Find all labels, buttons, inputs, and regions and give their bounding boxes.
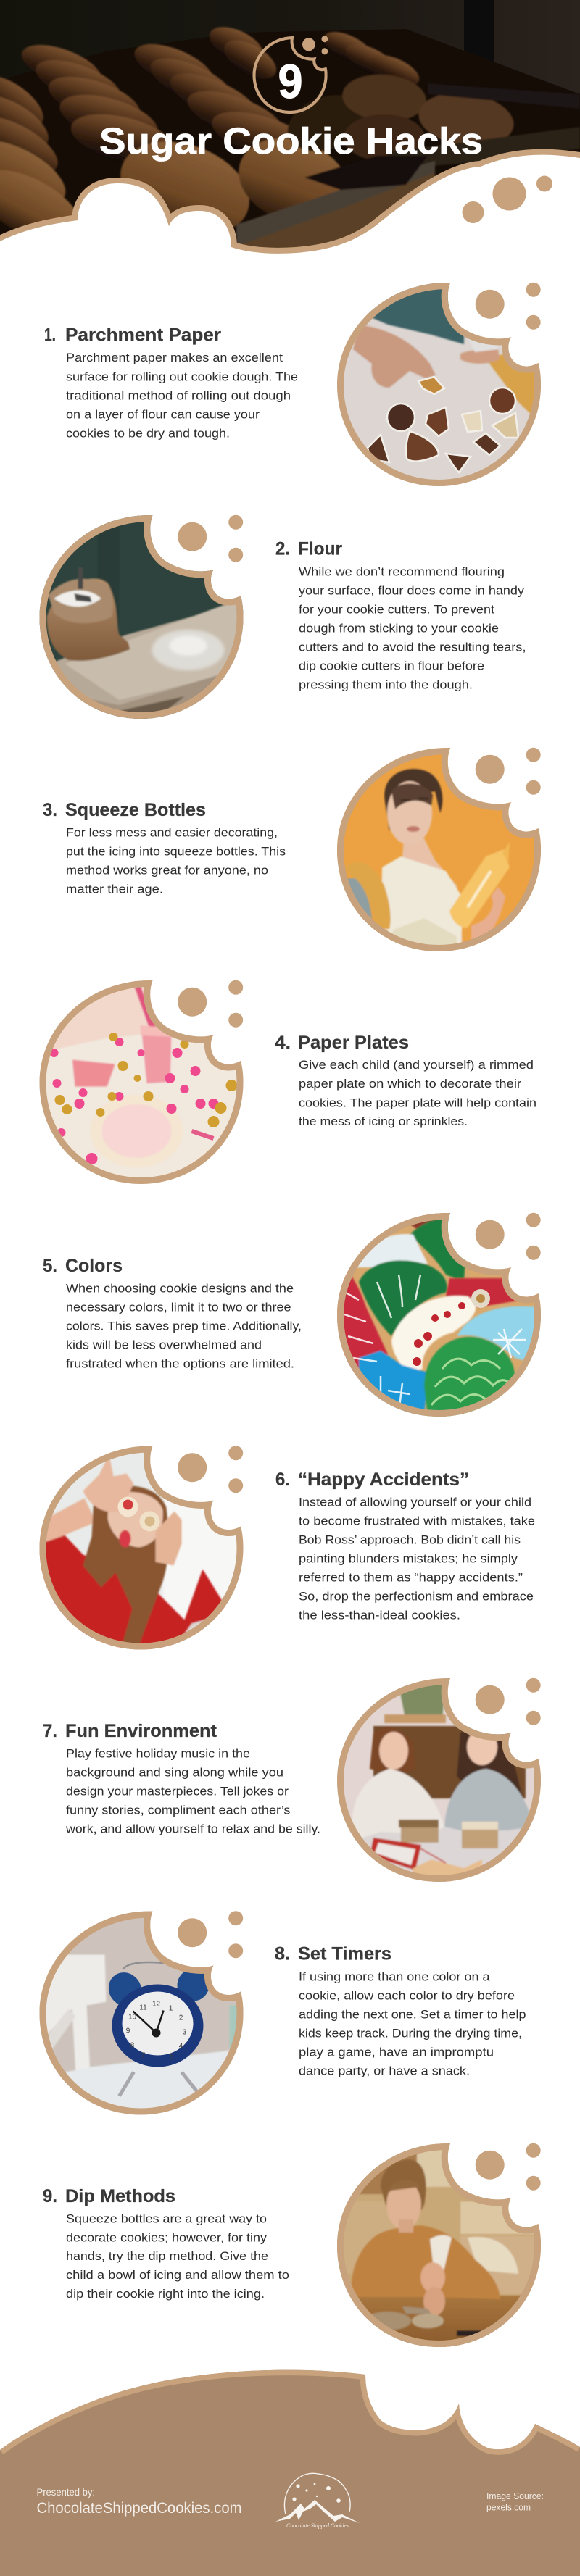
heading: Parchment Paper — [65, 325, 221, 346]
text block: If using more than one color on a — [299, 1971, 490, 1984]
text block: So, drop the perfectionism and embrace — [299, 1590, 534, 1603]
panel: 1 Parchment Paper — [44, 283, 541, 486]
image: blue alarm clock: 7 — [141, 2052, 146, 2059]
heading: 8. — [275, 1943, 290, 1964]
image: blue alarm clock — [39, 1911, 244, 2114]
heading: 6. — [276, 1470, 290, 1490]
icon: crumbs — [476, 283, 541, 330]
text block — [66, 826, 286, 896]
text block: When choosing cookie designs and the — [66, 1282, 294, 1295]
footer: presented by — [36, 2486, 242, 2517]
text block: work, and allow yourself to relax and be silly. — [65, 1822, 320, 1835]
image: bag of flour on a board — [39, 515, 244, 719]
text block: your surface, flour does come in handy — [299, 584, 525, 597]
panel: 7 Fun Environment — [43, 1678, 541, 1882]
text block: play a game, have an impromptu — [299, 2046, 494, 2059]
footer: presented by: Presented by: — [36, 2486, 95, 2498]
text block: frustrated when the options are limited. — [66, 1357, 294, 1370]
icon: crumbs — [476, 1678, 541, 1725]
icon: crumbs — [178, 1446, 243, 1493]
text block: necessary colors, limit it to two or three — [66, 1301, 291, 1314]
panel: 4 Paper Plates — [39, 980, 536, 1184]
icon: header crumbs — [463, 175, 552, 223]
heading: Fun Environment — [65, 1721, 218, 1741]
image: hands decorating cookies on parchment — [337, 283, 541, 486]
text block: cookies to be dry and tough. — [66, 428, 230, 441]
text block: pressing them into the dough. — [299, 679, 473, 692]
text block: cutters and to avoid the resulting tears, — [299, 641, 526, 654]
text block: referred to them as “happy accidents.” — [299, 1571, 523, 1584]
panel: 6 Happy Accidents — [39, 1446, 535, 1649]
icon: crumbs — [476, 748, 541, 795]
text block: dance party, or have a snack. — [299, 2065, 470, 2078]
image: blue alarm clock: 8 — [130, 2042, 135, 2049]
text block: cookies. The paper plate will help contain — [299, 1096, 536, 1109]
heading: Set Timers — [298, 1943, 392, 1964]
footer: presented by: ChocolateShippedCookies.com — [36, 2500, 242, 2517]
heading: 3. — [43, 800, 57, 820]
image: blue alarm clock: 1 — [169, 2004, 173, 2013]
image: woman with cookies over her eyes — [39, 1446, 244, 1649]
icon: crumbs — [476, 1213, 541, 1260]
image: blue alarm clock: 4 — [179, 2042, 183, 2051]
text block — [66, 2213, 289, 2301]
image: woman holding squeeze bottle — [337, 748, 541, 954]
title: Sugar Cookie Hacks — [99, 120, 483, 162]
text block: dough from sticking to your cookie — [299, 622, 499, 635]
text block: Parchment paper makes an excellent — [66, 351, 283, 364]
icon: crumbs — [178, 515, 243, 562]
image: girl piping icing on cookies — [337, 2143, 541, 2347]
image: blue alarm clock: 10 — [128, 2013, 136, 2022]
text block — [299, 1971, 526, 2078]
heading: Dip Methods — [65, 2186, 175, 2206]
icon: header bitten cookie badge — [252, 36, 328, 114]
text block — [299, 1496, 535, 1622]
heading: 7. — [43, 1721, 57, 1741]
footer: image source: pexels.com — [486, 2501, 531, 2513]
panel: 8 Set Timers — [39, 1911, 526, 2114]
image: iced holiday cookies — [337, 1213, 541, 1417]
text block: for your cookie cutters. To prevent — [299, 603, 494, 616]
text block: dip cookie cutters in flour before — [299, 660, 484, 673]
heading: Colors — [65, 1256, 123, 1276]
image: two women unpacking cookie boxes — [337, 1678, 541, 1882]
footer: image source — [486, 2490, 544, 2513]
text block: decorate cookies; however, for tiny — [66, 2231, 268, 2244]
text block: the less-than-ideal cookies. — [299, 1609, 460, 1622]
header photo: cookies on a tray — [0, 0, 580, 261]
image: blue alarm clock: 3 — [183, 2029, 187, 2036]
footer: image source: Image Source: — [486, 2490, 544, 2501]
heading: Paper Plates — [298, 1033, 409, 1053]
text block: dip their cookie right into the icing. — [66, 2288, 265, 2301]
text block: kids will be less overwhelmed and — [66, 1338, 262, 1351]
image: blue alarm clock: 2 — [179, 2014, 183, 2022]
heading — [276, 539, 342, 559]
text block: method works great for anyone, no — [66, 864, 268, 877]
wave: white header edge — [0, 155, 580, 312]
icon: crumbs — [178, 980, 243, 1028]
text block — [65, 1747, 320, 1835]
image: blue alarm clock: 11 — [139, 2004, 147, 2012]
text block: painting blunders mistakes; he simply — [299, 1552, 518, 1565]
panel: 9 Dip Methods — [43, 2143, 541, 2347]
text block: put the icing into squeeze bottles. This — [66, 845, 286, 858]
text block — [299, 565, 526, 692]
title number: 9 — [278, 54, 303, 108]
text block: surface for rolling out cookie dough. The — [66, 370, 298, 383]
text block: traditional method of rolling out dough — [66, 389, 291, 402]
icon: crumbs — [178, 1911, 243, 1958]
heading: 4. — [275, 1033, 291, 1053]
text block: background and sing along while you — [66, 1766, 283, 1779]
image: party cups, plate and confetti — [39, 980, 244, 1184]
text block: Give each child (and yourself) a rimmed — [299, 1059, 534, 1072]
image: blue alarm clock: 5 — [170, 2052, 174, 2061]
text block: hands, try the dip method. Give the — [66, 2250, 268, 2263]
text block: kids keep track. During the drying time, — [299, 2027, 522, 2041]
text block: child a bowl of icing and allow them to — [66, 2269, 289, 2282]
icon: crumbs — [476, 2143, 541, 2191]
panel: 3 Squeeze Bottles — [43, 748, 541, 954]
text block: Play festive holiday music in the — [66, 1747, 250, 1760]
text block — [66, 351, 298, 441]
text block: While we don’t recommend flouring — [299, 565, 505, 578]
text block: to become frustrated with mistakes, take — [299, 1514, 535, 1527]
text block: funny stories, compliment each other’s — [66, 1804, 290, 1817]
text block: For less mess and easier decorating, — [66, 826, 278, 839]
text block: matter their age. — [66, 883, 163, 896]
image: blue alarm clock: 9 — [126, 2027, 130, 2035]
heading: “Happy Accidents” — [298, 1470, 469, 1490]
panel: 5 Colors — [43, 1213, 541, 1417]
heading: 2. — [276, 539, 290, 559]
panel: 2 Flour — [39, 515, 526, 719]
heading: Flour — [298, 539, 342, 559]
text block: Bob Ross’ approach. Bob didn’t call his — [299, 1534, 521, 1547]
text block — [299, 1059, 536, 1128]
footer band with bitten edge — [0, 2370, 580, 2576]
text block: on a layer of flour can cause your — [66, 409, 260, 422]
text block: Squeeze bottles are a great way to — [66, 2213, 267, 2226]
text block: design your masterpieces. Tell jokes or — [66, 1785, 289, 1798]
text block: Instead of allowing yourself or your child — [299, 1496, 531, 1509]
heading: 9. — [43, 2186, 57, 2206]
heading: Squeeze Bottles — [65, 800, 206, 820]
footer: logo — [276, 2473, 360, 2529]
image: blue alarm clock: 12 — [152, 2000, 160, 2009]
text block: adding the next one. Set a timer to help — [299, 2009, 526, 2022]
text block: paper plate on which to decorate their — [299, 1077, 522, 1091]
text block: cookie, allow each color to dry before — [299, 1990, 515, 2003]
heading: 5. — [43, 1256, 57, 1276]
heading: 1. — [44, 325, 56, 346]
text block — [66, 1282, 302, 1370]
text block: colors. This saves prep time. Additionally, — [66, 1320, 302, 1333]
text block: the mess of icing or sprinkles. — [299, 1115, 468, 1128]
footer: logo: Chocolate Shipped Cookies — [286, 2522, 349, 2529]
